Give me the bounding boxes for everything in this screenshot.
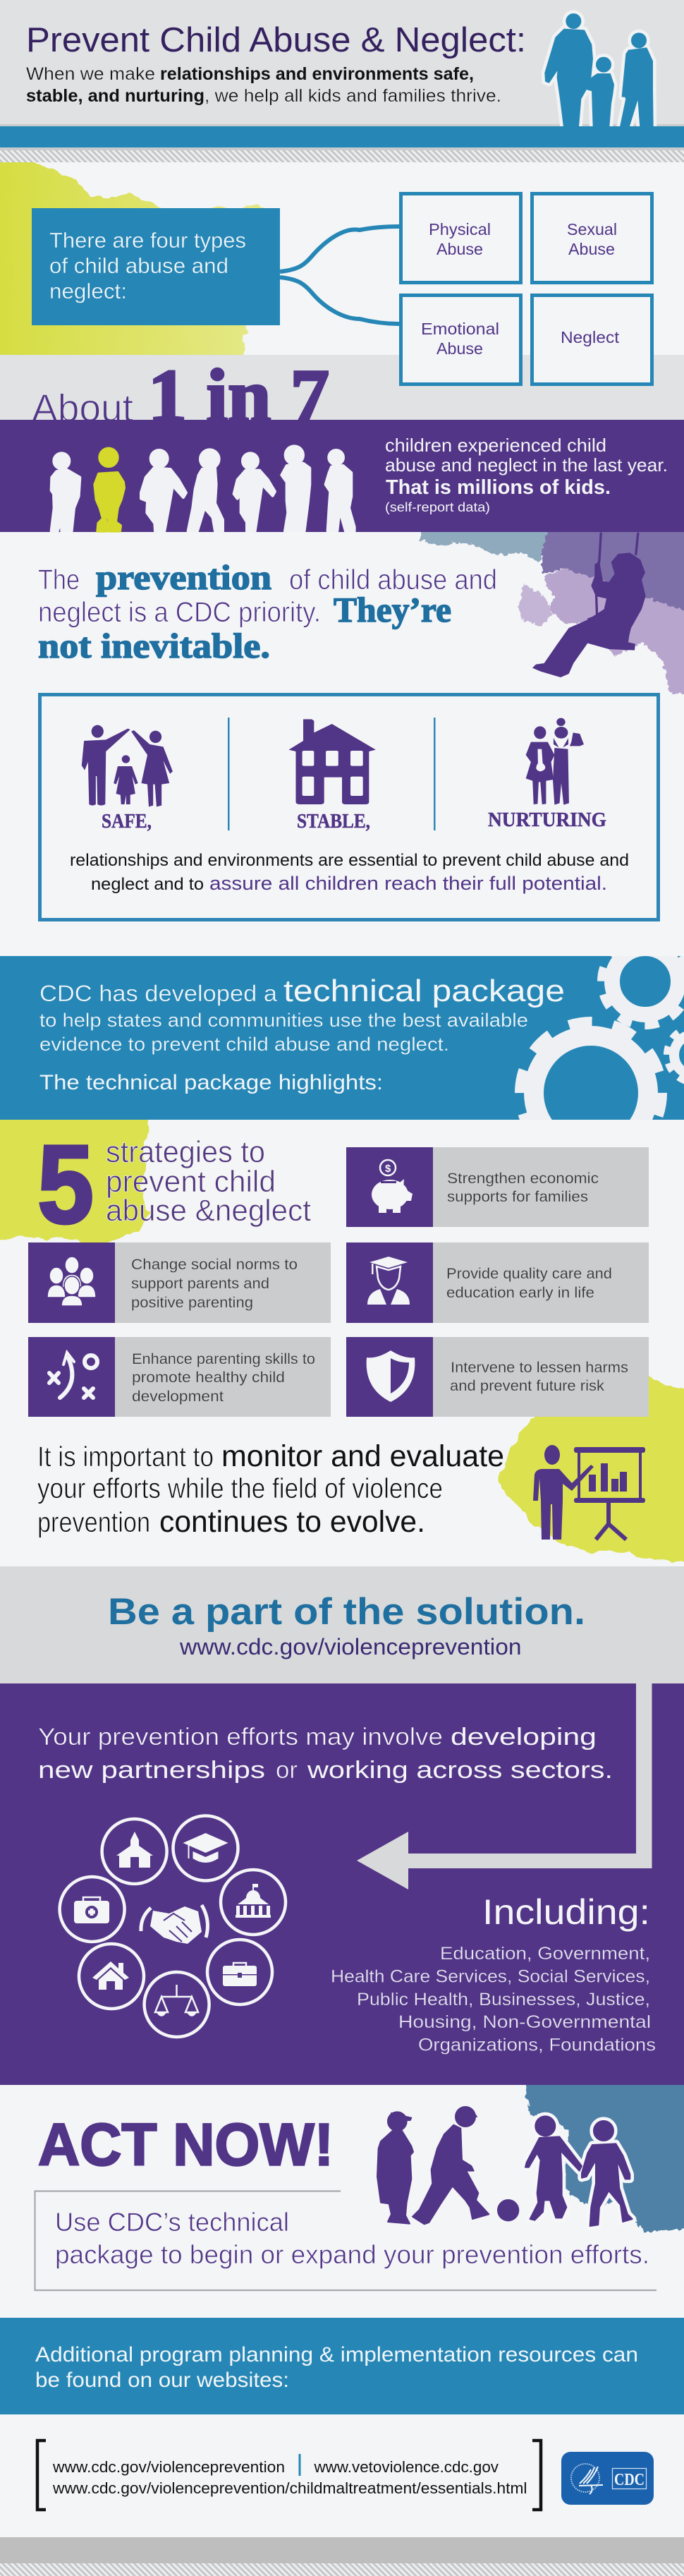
- icon: presenter with chart: [533, 1445, 645, 1540]
- icon: child on swing: [532, 533, 646, 677]
- box: emotional abuse: Emotional: [421, 320, 499, 338]
- link list: www.cdc.gov/violenceprevention: [52, 2458, 285, 2476]
- box: emotional abuse: [401, 295, 520, 384]
- heading: 5 strategies: 5: [37, 1123, 94, 1247]
- icon: nurturing family: [526, 718, 584, 805]
- strategy: quality care and education: [346, 1242, 649, 1323]
- text: technical package intro: CDC has developed a: [39, 981, 277, 1006]
- text: technical package intro: to help states and communities use the best available: [39, 1010, 528, 1031]
- link list: www.cdc.gov/violenceprevention/childmaltreatment/essentials.html: [52, 2479, 527, 2497]
- heading: 5 strategies: [37, 1123, 311, 1247]
- strategy: parenting skills: [28, 1337, 331, 1417]
- blue band under header: [0, 126, 684, 147]
- text: monitor and evaluate: It is important to: [37, 1441, 214, 1473]
- text: technical package intro: technical package: [283, 974, 565, 1008]
- text: sector list: Health Care Services, Social Services,: [331, 1967, 650, 1987]
- heading: Be a part of the solution.: [108, 1591, 585, 1633]
- text: sector list: Housing, Non-Governmental: [398, 2012, 651, 2032]
- icon: piggy bank: $: [385, 1163, 391, 1175]
- subtitle: [26, 64, 501, 106]
- icon: group of people: [47, 1257, 96, 1306]
- connector lines: [280, 226, 399, 324]
- footer band: [0, 2537, 684, 2563]
- strategy: social norms: [28, 1242, 331, 1323]
- text: monitor and evaluate: your efforts while the field of violence: [37, 1473, 443, 1504]
- text: partnerships: new partnerships: [38, 1757, 265, 1784]
- text: partnerships: working across sectors.: [307, 1757, 613, 1784]
- panel: website links: [37, 2441, 654, 2510]
- panel: additional resources: [0, 2318, 684, 2414]
- icon: shield: [367, 1350, 415, 1402]
- link: www.cdc.gov/violenceprevention: [179, 1634, 522, 1659]
- panel: partnerships: [0, 1683, 684, 2085]
- box: sexual abuse: Abuse: [568, 240, 615, 258]
- callout: four types: of child abuse and: [49, 253, 228, 278]
- panel: safe stable nurturing: [39, 694, 659, 920]
- heading: 5 strategies: abuse &neglect: [106, 1194, 311, 1228]
- strategy: economic supports: Strengthen economic: [447, 1171, 599, 1187]
- icon: briefcase: [223, 1963, 257, 1986]
- text: monitor and evaluate: prevention: [37, 1507, 150, 1538]
- text: monitor and evaluate: monitor and evaluate: [221, 1439, 504, 1473]
- labels: safe stable nurturing: SAFE,: [102, 810, 152, 833]
- heading: act now: ACT NOW!: [38, 2111, 334, 2177]
- text: use the technical package: [55, 2208, 649, 2269]
- text: technical package intro: evidence to prevent child abuse and neglect.: [39, 1034, 449, 1055]
- strategy: quality care and education: Provide quality care and: [446, 1266, 612, 1282]
- statistic text: [385, 435, 668, 514]
- text: partnerships: developing: [451, 1724, 597, 1750]
- link list: www.vetoviolence.cdc.gov: [313, 2458, 499, 2476]
- icon: family silhouette: [545, 14, 653, 127]
- icon: piggy bank: [372, 1160, 413, 1213]
- heading: prevention is a priority: prevention: [96, 557, 271, 597]
- brackets: [37, 2441, 541, 2510]
- heading: prevention is a priority: not inevitable.: [38, 626, 270, 665]
- box: sexual abuse: Sexual: [567, 220, 617, 238]
- statistic text: (self-report data): [385, 500, 490, 514]
- icon: capitol: [236, 1884, 271, 1918]
- subtitle: , we help all kids and families thrive.: [204, 86, 501, 106]
- box: emotional abuse: Abuse: [436, 339, 483, 358]
- watercolor: yellow: [0, 162, 265, 355]
- strategy: parenting skills: development: [132, 1389, 224, 1405]
- heading: including: Including:: [482, 1892, 650, 1932]
- icon: house: [92, 1961, 129, 1990]
- text: sector list: Public Health, Businesses, Justice,: [357, 1990, 650, 2009]
- box: neglect: [532, 295, 652, 384]
- box: sexual abuse: [532, 193, 652, 282]
- heading: 5 strategies: strategies to: [106, 1135, 265, 1169]
- box: neglect: Neglect: [561, 328, 620, 346]
- strategy: social norms: Change social norms to: [131, 1257, 298, 1273]
- strategy: social norms: support parents and: [131, 1276, 269, 1292]
- text: essential relationships: [70, 851, 629, 894]
- heading: about 1 in 7: 1 in 7: [148, 355, 329, 438]
- strategy: quality care and education: education early in life: [446, 1285, 594, 1301]
- heading: prevention is a priority: They’re: [334, 590, 451, 629]
- strategy: economic supports: [346, 1147, 649, 1227]
- strategy: economic supports: supports for families: [447, 1189, 588, 1205]
- icon: graduation cap: [183, 1833, 228, 1863]
- heading: prevention is a priority: of child abuse and: [289, 564, 497, 595]
- box: physical abuse: Physical: [429, 220, 491, 238]
- text: sector list: [331, 1944, 656, 2055]
- panel: five strategies: [0, 1108, 684, 1570]
- icon: handshake: [141, 1905, 207, 1944]
- text: partnerships: or: [276, 1757, 298, 1784]
- statistic text: children experienced child: [385, 435, 606, 456]
- panel: additional resources: be found on our websites:: [35, 2369, 289, 2392]
- icon: play diagram: [49, 1353, 97, 1398]
- heading: 5 strategies: prevent child: [106, 1165, 276, 1199]
- icon: school: [116, 1832, 153, 1868]
- panel: 1 in 7 statistic band: [0, 420, 684, 532]
- watercolor: yellow right: [497, 1369, 684, 1570]
- icon: medical kit: [74, 1897, 109, 1923]
- text: technical package intro: The technical package highlights:: [39, 1071, 383, 1094]
- watercolor: blue and purple wash: [421, 515, 684, 694]
- link list: [52, 2454, 527, 2497]
- callout: four types: [32, 208, 280, 325]
- callout: four types: neglect:: [49, 279, 127, 303]
- labels: safe stable nurturing: NURTURING: [488, 809, 606, 831]
- text: technical package intro: [39, 974, 565, 1094]
- text: essential relationships: neglect and to: [91, 875, 204, 894]
- strategy: intervene: Intervene to lessen harms: [451, 1360, 628, 1376]
- box: physical abuse: Abuse: [436, 240, 483, 258]
- icon: CDC logo: [561, 2452, 654, 2505]
- statistic text: That is millions of kids.: [386, 476, 611, 499]
- statistic text: abuse and neglect in the last year.: [385, 454, 668, 476]
- text: essential relationships: relationships and environments are essential to prevent child abuse and: [70, 851, 629, 870]
- strategy: intervene: [346, 1337, 649, 1417]
- text: essential relationships: assure all children reach their full potential.: [209, 873, 607, 894]
- icon: graduate: [367, 1257, 410, 1305]
- icon: sectors circle: [60, 1816, 286, 2037]
- panel: be a part of the solution: [0, 1566, 684, 1683]
- heading: about 1 in 7: [32, 355, 329, 438]
- icon: seven children, one highlighted: [51, 446, 355, 531]
- panel: header: [0, 0, 684, 127]
- subtitle: stable, and nurturing: [26, 86, 204, 106]
- heading: prevention is a priority: neglect is a CDC priority.: [38, 597, 321, 628]
- watercolor: yellow top left: [0, 1120, 151, 1242]
- icon: scales of justice: [155, 1985, 198, 2015]
- strategy: social norms: positive parenting: [131, 1295, 253, 1311]
- heading: prevention is a priority: The: [38, 564, 80, 595]
- text: sector list: Education, Government,: [440, 1944, 650, 1964]
- labels: safe stable nurturing: STABLE,: [297, 810, 370, 833]
- strategy: parenting skills: Enhance parenting skills to: [132, 1351, 315, 1367]
- icon: children playing with ball: [377, 2107, 633, 2226]
- text: monitor and evaluate: [37, 1439, 504, 1539]
- text: use the technical package: package to begin or expand your prevention efforts.: [55, 2240, 649, 2269]
- panel: additional resources: Additional program planning & implementation resources can: [35, 2343, 638, 2366]
- arrow: [357, 1683, 652, 1889]
- panel: four types of abuse: [0, 150, 684, 420]
- icon: safe family under arms: [82, 725, 173, 806]
- box: physical abuse: [401, 193, 520, 282]
- text: partnerships: Your prevention efforts may involve: [38, 1724, 443, 1750]
- heading: prevention is a priority: [38, 557, 497, 665]
- panel: prevention priority: [38, 515, 684, 694]
- icon: gears: [515, 956, 684, 1120]
- text: sector list: Organizations, Foundations: [418, 2035, 656, 2055]
- watercolor: blue wash: [524, 2071, 684, 2233]
- panel: act now: [35, 2071, 684, 2290]
- text: partnerships: [38, 1724, 613, 1784]
- icon: house: [288, 719, 376, 804]
- callout frame: [35, 2191, 656, 2290]
- strategy: intervene: and prevent future risk: [450, 1378, 605, 1394]
- icon: CDC logo: CDC: [614, 2471, 645, 2489]
- strategy: parenting skills: promote healthy child: [132, 1369, 285, 1386]
- subtitle: When we make: [26, 64, 155, 84]
- labels: safe stable nurturing: [102, 809, 606, 833]
- callout: four types: There are four types: [49, 228, 246, 253]
- panel: technical package: [0, 956, 684, 1120]
- text: use the technical package: Use CDC’s technical: [55, 2208, 289, 2237]
- heading: about 1 in 7: About: [32, 386, 133, 430]
- title: Prevent Child Abuse & Neglect:: [26, 21, 526, 59]
- text: monitor and evaluate: continues to evolve.: [159, 1505, 425, 1539]
- subtitle: relationships and environments safe,: [160, 64, 474, 84]
